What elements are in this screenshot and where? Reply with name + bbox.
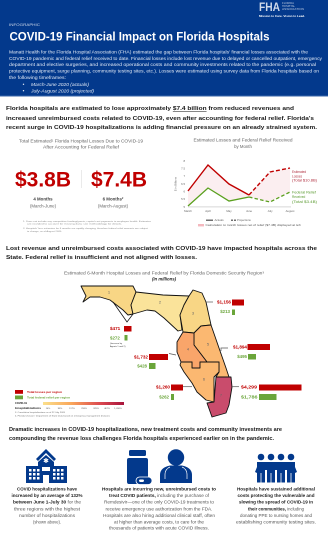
panel: community protection xyxy=(236,454,316,524)
map legend xyxy=(15,390,124,418)
compounding costs statement xyxy=(9,427,282,442)
chart heading: by Month xyxy=(234,144,252,149)
callout: region 4: $1,732 xyxy=(134,355,148,360)
line chart: August xyxy=(286,209,295,213)
footnotes xyxy=(23,220,152,233)
title: COVID-19 Financial Impact on Florida Hospitals xyxy=(10,30,270,44)
panel: hospitalizations xyxy=(12,449,83,524)
logo: FHA: FHA xyxy=(259,2,280,14)
map legend: Hospitalizations xyxy=(15,406,42,410)
series label: federal relief xyxy=(292,190,317,204)
community text: establishing community testing sites. xyxy=(236,519,316,524)
chart legend: Projections xyxy=(237,218,251,222)
stat: 6 month losses: $7.4B xyxy=(91,168,147,192)
community text: their communities, including xyxy=(248,506,305,511)
icon: group of people xyxy=(255,454,297,482)
key finding statement xyxy=(6,106,318,131)
region 5 xyxy=(194,325,229,377)
callout: region 1: (Increase by xyxy=(110,342,123,345)
stat: 4 month losses xyxy=(15,168,71,208)
icon: hospital xyxy=(26,449,67,483)
line chart: 6 xyxy=(183,190,185,194)
stat: 6 month losses xyxy=(91,168,147,208)
stat: 6 month losses: (March-August) xyxy=(98,204,129,208)
eyebrow label: INFOGRAPHIC xyxy=(9,23,40,27)
series label: federal relief: (Total $3.4B) xyxy=(292,200,317,204)
series label: federal relief: Federal Relief xyxy=(292,190,316,194)
stat: 4 month losses: $3.8B xyxy=(15,168,71,192)
heat scale bar: 117% xyxy=(69,408,75,410)
total losses heading xyxy=(19,138,144,150)
hospitalizations text: COVID hospitalizations have xyxy=(17,486,78,492)
heat scale bar: 376% xyxy=(93,408,99,410)
line chart: 7.5 xyxy=(181,166,185,170)
line chart: $ in Billions xyxy=(174,176,178,191)
series label: estimated losses xyxy=(292,170,317,182)
logo: FHA: Mission to Care. Vision to Lead. xyxy=(259,14,305,18)
line chart: March xyxy=(184,209,192,213)
hospitalizations text xyxy=(12,486,83,524)
series label: federal relief: Received xyxy=(292,195,306,199)
treatment costs text: receive emergency use authorization from the FDA. xyxy=(106,506,212,511)
line chart xyxy=(174,159,317,227)
intro text: July-August 2020 (projected) xyxy=(30,88,95,93)
intro text: protective equipment, surge planning, community testing sites, etc.). Losses were estimated using survey data from Florida hospitals based on xyxy=(9,69,320,74)
heat scale bar: 95% xyxy=(58,408,62,410)
map legend: Total losses per region xyxy=(27,390,62,394)
logo: FHA: HOSPITAL xyxy=(282,5,296,8)
intro text xyxy=(9,50,323,93)
intro text: department and elective surgeries, and increased operational costs and community investments related to the pandemic (e.g. personal xyxy=(9,62,316,67)
key finding statement: Florida hospitals are estimated to lose approximately $7.4 billion from reduced revenues and xyxy=(6,106,294,112)
regional impact statement: State. Federal relief is insufficient and not aligned with losses. xyxy=(6,255,198,261)
treatment costs text xyxy=(102,486,217,531)
line chart: April xyxy=(205,209,211,213)
region 3 xyxy=(180,290,211,333)
total losses heading: After Accounting for Federal Relief xyxy=(43,145,120,150)
intro text: COVID-19 pandemic and federal relief received to date. Financial losses include lost revenue due to delayed or cancelled outpatient, emergency xyxy=(9,56,323,61)
callout: region 7: $1,786 xyxy=(241,395,258,400)
logo: FHA: ASSOCIATION xyxy=(282,8,304,11)
map legend: Total federal relief per region xyxy=(27,396,70,400)
callout: region 6: $262 xyxy=(159,395,170,400)
key finding statement: recent surge in COVID-19 hospitalizations is adding financial pressure on an already strained system. xyxy=(6,125,318,131)
footnotes: 1. Does not include any competitive funding/grants, capital cost payments to employee health. Estimates xyxy=(23,220,152,223)
series label: estimated losses: Estimated xyxy=(292,170,306,174)
callout: region 3: $1,156 xyxy=(217,300,231,305)
line chart: 5.5 xyxy=(181,197,185,201)
callout: region 4: $428 xyxy=(137,364,148,369)
callout: region 1 xyxy=(110,302,133,348)
series label: estimated losses: Losses xyxy=(292,174,303,178)
chart heading: Estimated Losses and Federal Relief Received xyxy=(194,138,293,142)
map legend: 3. Cumulative hospitalizations as of 22 July 2020 xyxy=(15,411,66,414)
footnotes: are rounded to account for missing data; see methodology for details. xyxy=(27,222,123,226)
region 3: 3 xyxy=(192,310,195,316)
region 1 xyxy=(81,286,136,315)
treatment costs text: Hospitals are also hiring additional clinical staff, often xyxy=(103,513,216,518)
community text: costs protecting the vulnerable and xyxy=(238,493,315,498)
map legend: COVID-19 xyxy=(15,401,28,405)
callout: region 1: $471 xyxy=(110,326,121,331)
region 2 xyxy=(131,292,189,331)
community text: Hospitals have sustained additional xyxy=(237,486,315,492)
map legend: 4. Florida Division / Department of State Data based on emergency management divisions xyxy=(15,414,111,418)
regional impact statement: Lost revenue and unreimbursed costs associated with COVID-19 have impacted hospitals across the xyxy=(6,246,317,252)
line chart: 6.5 xyxy=(181,182,185,186)
line chart: June xyxy=(246,209,252,213)
map heading: (in millions) xyxy=(152,276,177,282)
treatment costs text: Remdesivir—one of the only COVID-19 treatments to xyxy=(104,500,215,504)
line: estimated losses xyxy=(188,165,290,195)
region 7: 7 xyxy=(220,392,223,398)
stat: 6 month losses: 6 Months² xyxy=(103,196,124,202)
line chart: 5 xyxy=(183,205,185,209)
panel: header banner xyxy=(0,0,328,96)
region 2: 2 xyxy=(159,300,162,304)
icon: clinician xyxy=(160,449,192,483)
intro text: March-June 2020 (actuals) xyxy=(31,82,90,87)
line chart: 7 xyxy=(183,174,185,178)
callout: region 3: $213 xyxy=(220,309,231,314)
line chart: 8 xyxy=(183,159,185,163)
callout: region 4 xyxy=(134,354,176,369)
compounding costs statement: Dramatic increases in COVID-19 hospitalizations, new treatment costs and community investments are xyxy=(9,427,282,433)
chart legend: Calculation to month losses net of relief ($7.4B) displayed at left xyxy=(206,224,301,227)
region 4: 4 xyxy=(187,346,190,352)
region 4 xyxy=(177,332,207,368)
callout: region 5 xyxy=(221,344,270,360)
callout: region 7 xyxy=(232,384,302,400)
chart heading xyxy=(194,138,293,149)
callout: region 5: $1,894 xyxy=(233,345,247,350)
line chart: May xyxy=(226,209,232,213)
callout: region 6: $1,260 xyxy=(156,385,170,390)
hospitalizations text: number of hospitalizations xyxy=(19,513,75,518)
series label: estimated losses: (Total $10.8B) xyxy=(292,178,317,182)
region 5: 5 xyxy=(207,342,210,346)
regional impact statement xyxy=(6,246,317,261)
region 6: 6 xyxy=(203,376,206,382)
treatment costs text: at higher than average costs, to care for the xyxy=(114,519,205,524)
community text: donating PPE to nursing homes and xyxy=(240,513,313,518)
callout: region 1: Agents 1 and 2) xyxy=(110,345,126,348)
stat: 4 month losses: (March-June) xyxy=(30,204,57,208)
key finding statement: increased unreimbursed costs related to COVID-19, even after accounting for federal relief. Florida's xyxy=(6,116,314,122)
footnotes: 2. Hospitals' loss estimates for 6 months are rapidly changing; therefore federal relief amounts are subject xyxy=(23,227,148,230)
panel: total estimated losses xyxy=(15,138,152,233)
logo: FHA: FLORIDA xyxy=(282,2,294,5)
map heading: Estimated 6-Month Hospital Losses and Federal Relief by Florida Domestic Security Region³ xyxy=(64,270,265,275)
heat scale bar: 1,016% xyxy=(114,408,122,410)
callout: region 6 xyxy=(156,384,192,400)
callout: region 5: $495 xyxy=(237,354,248,359)
map: Florida regions xyxy=(81,286,232,417)
hospitalizations text: between June 1-July 30 for the xyxy=(13,500,82,504)
chart legend: Actuals xyxy=(214,218,224,222)
region 1: 1 xyxy=(108,290,111,294)
community text: slowing the spread of COVID-19 in xyxy=(239,500,314,504)
heat scale bar: 14% xyxy=(46,408,50,410)
icon: medicine bottle and pill xyxy=(127,450,152,484)
callout: region 3 xyxy=(206,300,244,315)
heat scale bar: 218% xyxy=(81,408,87,410)
community text xyxy=(236,486,316,524)
heat scale bar xyxy=(43,402,124,410)
callout: region 7: $4,299 xyxy=(241,385,257,390)
treatment costs text: thousands of patients with acute COVID illness. xyxy=(109,526,209,531)
region 7 xyxy=(207,377,232,417)
hospitalizations text: (shown above). xyxy=(33,519,61,524)
intro text: Manatt Health for the Florida Hospital Association (FHA) estimated the gap between Florida hospitals' financial losses associated with the xyxy=(9,50,309,54)
panel: treatment costs xyxy=(102,449,217,531)
stat: 4 month losses: 4 Months xyxy=(33,196,53,202)
line: federal relief xyxy=(188,188,290,206)
callout: region 1: $272 xyxy=(110,336,120,341)
chart legend xyxy=(198,218,301,227)
panel: losses and relief by month xyxy=(174,138,317,227)
heat scale bar: 467% xyxy=(104,408,110,410)
treatment costs text: treat COVID patients, including the purchase of xyxy=(109,493,210,498)
intro text: the following timeframes: xyxy=(9,75,66,80)
compounding costs statement: compounding the revenue loss challenges Florida hospitals experienced earlier on in the pandemic. xyxy=(9,436,275,442)
region 6 xyxy=(180,362,219,402)
treatment costs text: Hospitals are incurring new, unreimbursed costs to xyxy=(102,486,217,492)
logo: FHA xyxy=(259,2,305,18)
footnotes: to change, as of August 2020. xyxy=(27,230,62,233)
map heading xyxy=(64,270,265,282)
total losses heading: Total Estimated¹ Florida Hospital Losses Due to COVID-19 xyxy=(19,138,144,144)
hospitalizations text: increased by an average of 132% xyxy=(12,493,83,498)
hospitalizations text: three regions with the highest xyxy=(14,506,81,511)
line chart: July xyxy=(268,209,273,213)
